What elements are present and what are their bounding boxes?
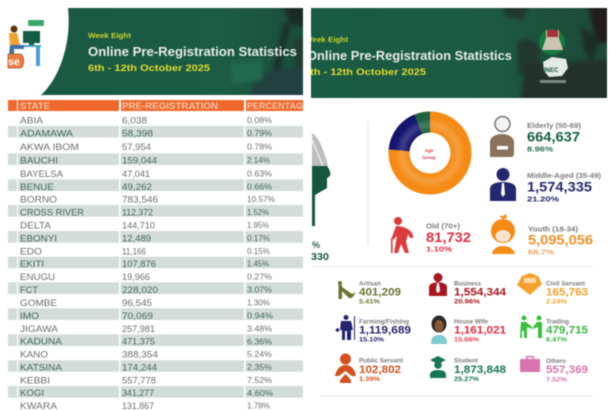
occupation: House Wife: 1,161,021 [454,324,506,336]
occupation: Artisan: 401,209 [359,286,401,298]
stat: Youth: 5,095,056 [528,232,594,248]
table row: Bayelsa: 47,041 [122,169,150,179]
icon: briefcase [520,356,540,372]
table row: Akwa Ibom: 57,954 [122,142,151,152]
table row: Benue: 49,262 [122,182,152,192]
occupation: Business: 1,554,344 [454,286,507,298]
donut chart: age group [388,112,472,194]
table row: Delta: DELTA [20,220,52,230]
stat: Old: 81,732 [426,230,471,245]
table row: Imo: 0.94% [247,312,273,320]
INEC logo: INEC [544,68,559,74]
occupation: Business: Business [454,280,481,288]
occupation: Artisan [338,280,401,306]
occupation: Civil Servant: 2.24% [546,298,568,306]
occupation: Farming/Fishing: 1,119,689 [359,324,411,336]
table row: Cross River: 112,372 [122,208,153,218]
table row: Akwa Ibom: AKWA IBOM [20,142,79,152]
stat: Old [391,217,471,254]
table row: Kwara [20,401,270,410]
table row: Bauchi: 159,044 [122,156,157,166]
table row: Kano: 388,354 [122,350,158,360]
occupation: Public Servant: 1.39% [359,376,381,383]
table row: Kano [20,350,272,360]
table row: Abia: ABIA [20,116,44,126]
occupation: Others: 557,369 [546,364,588,376]
occupation: House Wife: House Wife [454,318,488,326]
table row: Edo: 0.15% [247,247,270,256]
table row: Bauchi [20,156,270,166]
occupation: Public Servant: Public Servant [359,358,404,364]
table row: Edo: 11,166 [122,246,146,256]
table row: Abia: 0.08% [247,116,272,125]
table row: Abia: 6,038 [122,116,147,126]
panel: right statistics page [304,4,612,397]
right banner: 6th - 12th October 2025 [304,67,426,77]
occupation: Civil Servant [517,273,588,306]
stat: Youth: Youth (18-34) [528,226,578,234]
table row: Abia [20,116,272,126]
occupation: Others: Others [546,358,566,365]
stat: Elderly: 664,637 [527,130,580,144]
table row: Katsina: KATSINA [20,362,63,372]
table row: Jigawa [20,324,272,334]
table row: Edo: EDO [20,246,42,256]
table row: Bayelsa: BAYELSA [20,169,64,179]
table row: FCT [20,285,272,295]
table row: Katsina [20,362,272,372]
table row: Ebonyi: 0.17% [247,234,270,243]
table row: Kaduna [20,337,272,347]
table row: Borno: 783,546 [122,194,158,204]
table row: Enugu: 19,966 [122,272,150,282]
table row: Borno: 10.57% [247,195,275,204]
icon: two people trading [520,316,542,338]
occupation: Trading: Trading [546,318,569,326]
table row: Kogi: 4.60% [247,389,273,398]
stat: Middle-Aged: Middle-Aged (35-49) [527,173,601,180]
banner title: Online Pre-Registration Statistics [88,45,297,59]
table row: Delta [20,220,269,230]
stat: Elderly [490,116,581,157]
table row: Kaduna: 471,375 [122,337,155,347]
occupation: House Wife: 15.66% [454,336,480,344]
table row: Katsina: 174,244 [122,362,157,372]
female total: 330 [311,251,329,263]
table header: STATE [20,101,50,111]
table row: Gombe: 96,545 [122,298,152,308]
table row: Bauchi: 2.14% [247,156,270,165]
table row: Kogi: 341,277 [122,388,154,398]
occupation: Business [429,273,507,306]
banner week label: Week Eight [88,31,132,40]
table row: Delta: 144,710 [122,220,155,230]
table row: Adamawa: 58,398 [122,128,153,138]
icon: artisan [338,281,356,299]
table row: Bauchi: BAUCHI [20,156,58,166]
table row: Edo [20,246,270,256]
table row: Kaduna: KADUNA [20,337,63,347]
table row: Gombe: 1.30% [247,298,270,308]
donut label: Group [422,155,436,160]
icon: elderly man [490,116,514,157]
occupation: Artisan: Artisan [359,280,381,288]
table row: Kano: 5.24% [247,350,272,359]
table row: Akwa Ibom: 0.78% [247,142,272,152]
banner dates: 6th - 12th October 2025 [88,63,210,73]
table row: Bayelsa: 0.63% [247,170,272,178]
occupation: Student: 25.27% [454,376,480,383]
table row: Kebbi [20,376,272,386]
table row: Cross River: CROSS RIVER [20,208,84,218]
table row: Adamawa: 0.79% [247,129,272,138]
table row: Ebonyi: 12,489 [122,234,151,244]
table row: Adamawa [20,128,272,138]
icon: student [430,356,446,378]
icon: public servant [335,354,356,383]
stat: Middle-Aged [490,168,601,204]
table row: Benue [20,182,272,192]
table row: Bayelsa [20,169,272,179]
banner week label: Week Eight [305,35,349,44]
table row: Borno: BORNO [20,194,57,204]
icon: civil servant [517,273,542,295]
donut label: Age [425,148,434,153]
table row: Ekiti: EKITI [20,259,44,269]
table row: Imo: 70,069 [122,311,153,321]
table row: Kebbi: 557,778 [122,376,156,386]
table row: Ebonyi [20,234,270,244]
table row: Imo: IMO [20,311,39,321]
table row: Jigawa: 3.48% [247,324,272,334]
occupation: Farming/Fishing: Farming/Fishing [359,318,409,326]
table row: Imo [20,311,273,321]
table row: Akwa Ibom [20,142,272,152]
occupation: Trading: 6.47% [546,336,568,344]
table header [8,100,303,111]
stat: Old: Old (70+) [426,224,460,230]
right banner [304,4,612,102]
table header: PRE-REGISTRATION [122,101,218,111]
occupation: Student: 1,873,848 [454,364,506,376]
table row: Cross River: 1.52% [247,208,269,217]
stat: Middle-Aged: 21.20% [527,196,560,204]
table row: Benue: 0.66% [247,182,272,192]
table row: Delta: 1.95% [247,221,269,230]
icon: old person with cane [391,217,413,253]
occupation: Public Servant: 102,802 [359,364,401,376]
stat: Elderly: Elderly (50-69) [527,123,581,130]
table row: Kano: KANO [20,350,48,360]
female share: % [312,240,320,250]
table row: Ebonyi: EBONYI [20,234,57,244]
occupation: Farming/Fishing [336,315,411,344]
occupation: Civil Servant: 165,763 [546,286,588,298]
table row: Kogi: KOGI [20,388,44,398]
occupation: Business: 20.96% [454,298,481,306]
table row: Enugu: 0.27% [247,272,272,282]
occupation: Trading: 479,715 [546,324,588,336]
occupation: House Wife [431,316,506,344]
table row: Cross River [20,208,269,218]
table row: Benue: BENUE [20,182,54,192]
occupation: Farming/Fishing: 15.10% [359,336,385,344]
icon: business person [429,273,447,296]
table row: Adamawa: ADAMAWA [20,128,74,138]
illustration: person at computer [8,20,44,68]
table row: Ekiti: 107,876 [122,259,156,269]
INEC logo [539,29,568,83]
table row: Ekiti [20,259,269,269]
icon: youth [491,214,515,254]
stat: Old: 1.10% [426,246,453,254]
icon: house wife [431,316,447,344]
occupation: Others [520,356,588,384]
table row: Gombe: GOMBE [20,298,57,308]
table header: PERCENTAG [247,101,303,111]
stat: Youth: 68.7% [528,250,555,256]
female figure, cropped [311,133,330,263]
table row: Enugu: ENUGU [20,272,55,282]
table row: FCT: 3.07% [247,286,272,294]
occupation: Public Servant [335,354,404,383]
table row: Kaduna: 6.36% [247,338,272,346]
occupation: Civil Servant: Civil Servant [546,280,586,288]
icon: farmer [336,315,355,340]
occupation: Artisan: 5.41% [359,298,381,306]
occupation: Others: 7.52% [546,376,568,384]
table body [8,116,303,410]
table row: Katsina: 2.35% [247,363,272,372]
occupation: Student: Student [454,358,479,364]
table row: FCT: 228,020 [122,285,158,295]
table row: Enugu [20,272,272,282]
icon: middle-aged person [490,168,516,201]
table row: Kebbi: 7.52% [247,376,272,385]
occupation: Trading [520,316,588,344]
table row: FCT: FCT [20,285,38,295]
occupation: Student [430,356,506,383]
right banner: Online Pre-Registration Statistics [307,49,512,63]
table row: Jigawa: JIGAWA [20,324,59,334]
table row: Borno [20,194,275,204]
illustration: person at computer: se [8,56,20,68]
panel: left table page [8,4,308,410]
table row: Kogi [20,388,273,398]
table row: Jigawa: 257,981 [122,324,155,334]
table row: Kebbi: KEBBI [20,376,50,386]
stat: Elderly: 8.96% [527,146,554,154]
left banner [41,4,308,100]
stat: Middle-Aged: 1,574,335 [527,180,593,194]
table row: Gombe [20,298,270,308]
table row: Ekiti: 1.45% [247,260,269,268]
stat: Youth [491,214,594,256]
